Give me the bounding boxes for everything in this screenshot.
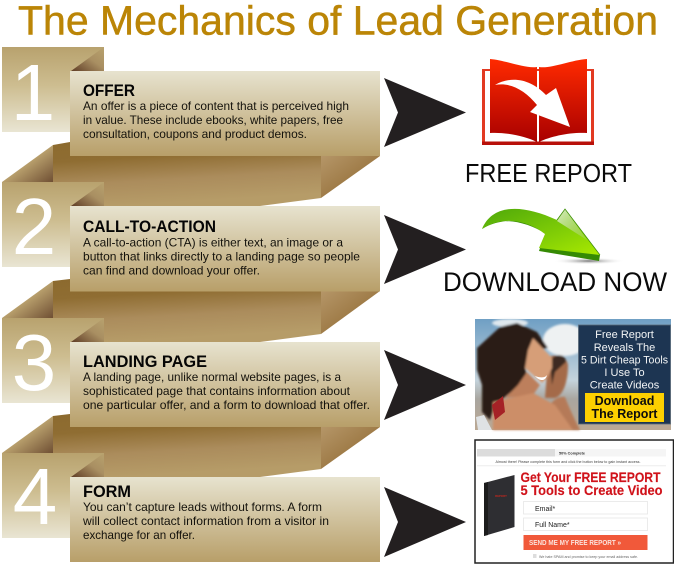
form headline	[520, 469, 662, 498]
arrow 2	[384, 215, 466, 284]
step 2: call-to-action: A call-to-action (CTA) is either text, an image or a	[83, 236, 343, 250]
privacy note: We hate SPAM and promise to keep your email address safe.	[539, 555, 638, 559]
step 4: form: You can’t capture leads without forms. A form	[83, 500, 322, 514]
icon: red open book with white arrow	[482, 59, 594, 145]
step 4: form	[2, 452, 380, 562]
submit button	[524, 535, 648, 550]
progress bar: 50% Complete	[559, 452, 585, 456]
landing page ad image: Free Report	[595, 329, 654, 341]
step 1: offer	[2, 47, 380, 156]
step 3: landing page: A landing page, unlike normal website pages, is a	[83, 370, 341, 384]
label: free report: FREE REPORT	[465, 158, 632, 188]
arrow 1	[384, 78, 466, 147]
step 1: offer: consultation, coupons and product demos.	[83, 127, 307, 141]
step 2: call-to-action: CALL-TO-ACTION	[83, 218, 216, 236]
submit button: SEND ME MY FREE REPORT »	[529, 538, 621, 547]
field: full name	[524, 518, 648, 530]
step 2: call-to-action: can find and download your offer.	[83, 264, 260, 278]
arrow 3	[384, 350, 466, 420]
step 2: call-to-action: 2	[12, 182, 56, 271]
book image: REPORT	[495, 494, 507, 498]
progress bar	[477, 449, 666, 456]
field: full name: Full Name*	[535, 522, 570, 529]
step 2: call-to-action	[2, 182, 380, 292]
instruction line: Almost there! Please complete this form and click the button below to gain instant access.	[496, 459, 640, 464]
landing page ad image: I Use To	[604, 367, 645, 379]
ribbon connector: step 2 to 3	[2, 279, 380, 342]
step 3: landing page: LANDING PAGE	[83, 353, 207, 371]
form headline: 5 Tools to Create Video	[520, 482, 662, 498]
step 3: landing page	[2, 318, 380, 427]
ribbon connector: step 3 to 4	[2, 414, 380, 477]
step 4: form: 4	[13, 452, 57, 541]
book image	[484, 475, 514, 536]
landing page ad image: Reveals The	[594, 342, 655, 354]
step 1: offer: in value. These include ebooks, white papers, free	[83, 113, 343, 127]
ribbon connector: step 1 to 2	[2, 142, 380, 206]
step 1: offer: 1	[11, 48, 55, 137]
field: email	[524, 502, 648, 514]
landing page ad image: 5 Dirt Cheap Tools	[581, 354, 668, 366]
form page screenshot	[475, 440, 674, 563]
step 1: offer: An offer is a piece of content that is perceived high	[83, 99, 349, 113]
landing page ad image: Create Videos	[590, 380, 660, 392]
arrow 4	[384, 487, 466, 557]
landing page ad image: Download	[595, 394, 654, 408]
label: download now: DOWNLOAD NOW	[443, 267, 667, 297]
step 2: call-to-action: button that links directly to a landing page so people	[83, 250, 360, 264]
step 4: form: FORM	[83, 483, 131, 501]
step 3: landing page: 3	[12, 318, 56, 407]
landing page ad image: The Report	[592, 407, 658, 421]
icon: green download arrow	[482, 209, 625, 264]
step 1: offer: OFFER	[83, 82, 135, 100]
field: email: Email*	[535, 506, 556, 513]
step 4: form: exchange for an offer.	[83, 528, 195, 542]
step 3: landing page: sophisticated page that contains information about	[83, 384, 351, 398]
step 3: landing page: one particular offer, and a form to download that offer.	[83, 398, 370, 412]
step 4: form: will collect contact information from a visitor in	[82, 514, 329, 528]
landing page ad image	[475, 319, 671, 430]
